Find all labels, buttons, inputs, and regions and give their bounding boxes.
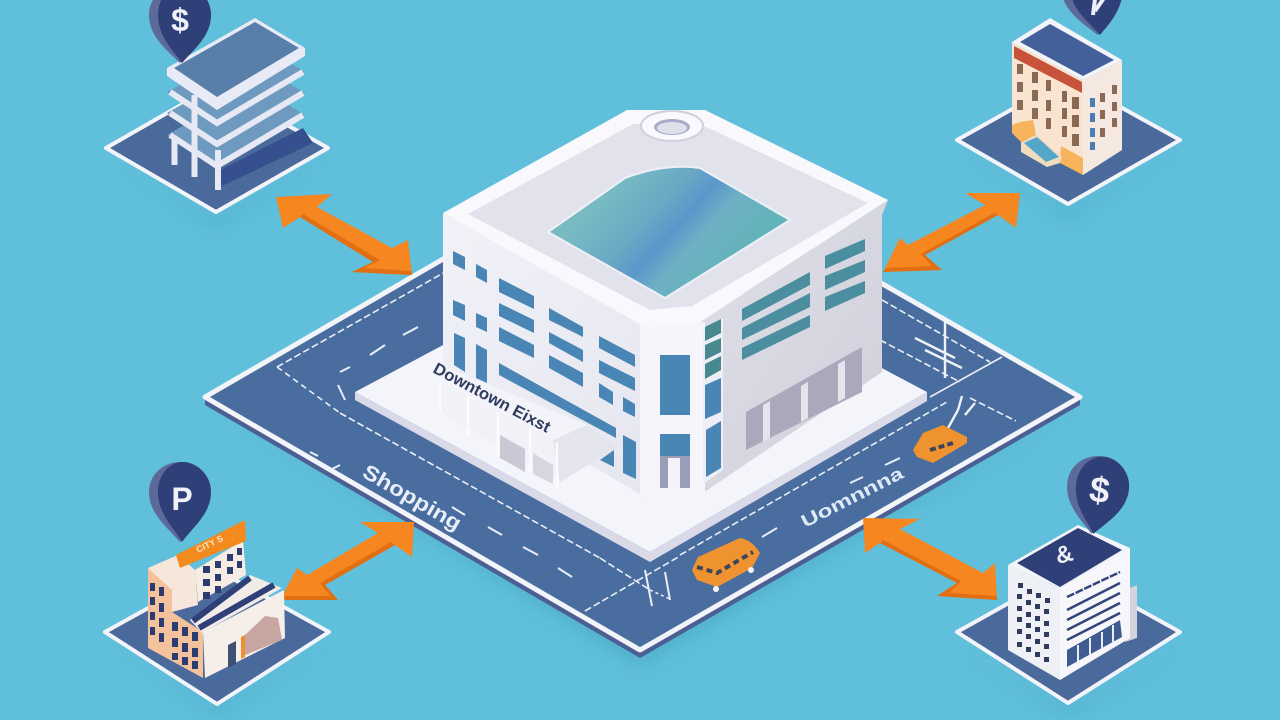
entrance canopy xyxy=(1021,135,1062,167)
road label: downtown street: Uomnnna xyxy=(798,462,908,532)
pad xyxy=(957,78,1180,204)
arrow: top left double arrow xyxy=(276,194,412,275)
right wall xyxy=(1060,548,1130,680)
left facade xyxy=(148,568,203,678)
pin: dollar xyxy=(149,0,211,63)
roof xyxy=(443,110,888,327)
property: top right hotel xyxy=(957,0,1180,204)
columns xyxy=(174,95,218,190)
ground floor orange panels xyxy=(1012,120,1036,142)
striped roof xyxy=(190,575,282,633)
car: orange bus on road xyxy=(692,538,760,592)
left facade xyxy=(443,213,645,497)
left windows xyxy=(1017,583,1050,662)
right window strips xyxy=(1067,572,1120,640)
pin: parking: P xyxy=(171,481,193,517)
central building xyxy=(430,110,888,498)
central road base xyxy=(205,145,1080,658)
pad xyxy=(957,570,1180,703)
pin: parking xyxy=(149,462,211,542)
left wall xyxy=(1008,565,1060,680)
property: bottom right office xyxy=(957,452,1180,703)
canopy sign text: Downtown Eixst xyxy=(430,360,554,437)
facade windows xyxy=(453,251,636,479)
pin: dollar: $ xyxy=(1087,468,1112,512)
entrance canopy xyxy=(430,360,618,490)
orange band xyxy=(176,520,246,568)
left wall xyxy=(1012,42,1083,175)
white tower mass xyxy=(148,555,198,612)
white plinth xyxy=(355,240,927,562)
top slab xyxy=(167,18,305,110)
pin: parking xyxy=(1061,0,1123,35)
arrow: bottom right double arrow xyxy=(863,518,997,600)
road label: shopping: Shopping xyxy=(358,460,465,535)
ground floor glazing xyxy=(1067,620,1122,667)
right wall xyxy=(1083,60,1122,175)
shop door xyxy=(245,616,282,655)
pin: dollar: $ xyxy=(171,2,189,38)
corner tower xyxy=(640,318,723,498)
property: bottom left mall xyxy=(105,462,329,704)
arrow: bottom left double arrow xyxy=(280,522,414,600)
pad xyxy=(105,570,329,704)
side annex xyxy=(1125,585,1137,642)
lower floors xyxy=(167,42,305,169)
property: top left parking structure xyxy=(106,0,328,212)
roof xyxy=(1008,525,1130,588)
upper tower xyxy=(195,540,246,602)
pad xyxy=(106,85,328,212)
car: orange van near junction xyxy=(913,425,967,463)
right facade xyxy=(203,590,285,678)
right facade xyxy=(700,200,888,495)
property: bottom left mall: CITY S xyxy=(194,533,225,555)
pin: dollar xyxy=(1061,452,1133,538)
windows xyxy=(1017,64,1117,146)
floor core xyxy=(220,128,313,187)
windows xyxy=(150,548,242,669)
right facade bands xyxy=(742,239,865,360)
roof logo: & xyxy=(1053,540,1076,570)
roof xyxy=(1012,18,1122,80)
arrow: top right double arrow xyxy=(883,193,1020,272)
red band xyxy=(1014,46,1082,93)
ground floor shop windows xyxy=(746,347,862,450)
